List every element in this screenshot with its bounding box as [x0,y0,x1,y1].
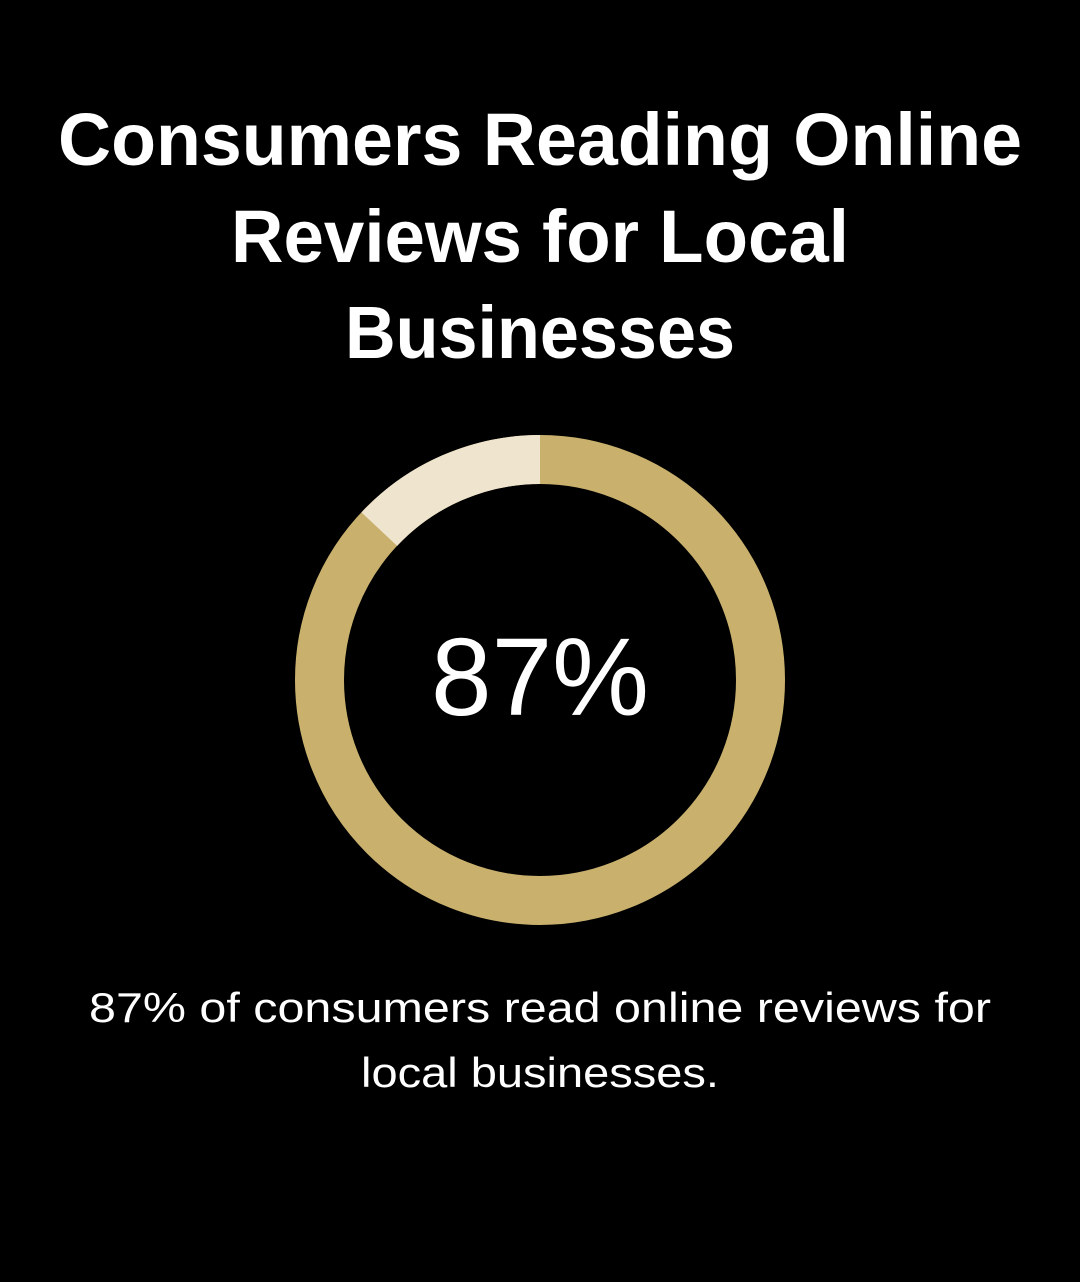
caption: local businesses. [361,1049,719,1096]
title: Reviews for Local [231,195,849,278]
title: Consumers Reading Online [58,98,1022,181]
caption [89,984,991,1096]
title [58,98,1022,374]
caption: 87% of consumers read online reviews for [89,984,991,1031]
title: Businesses [345,291,735,374]
donut chart [320,460,760,900]
center percentage: 87% [431,616,649,739]
